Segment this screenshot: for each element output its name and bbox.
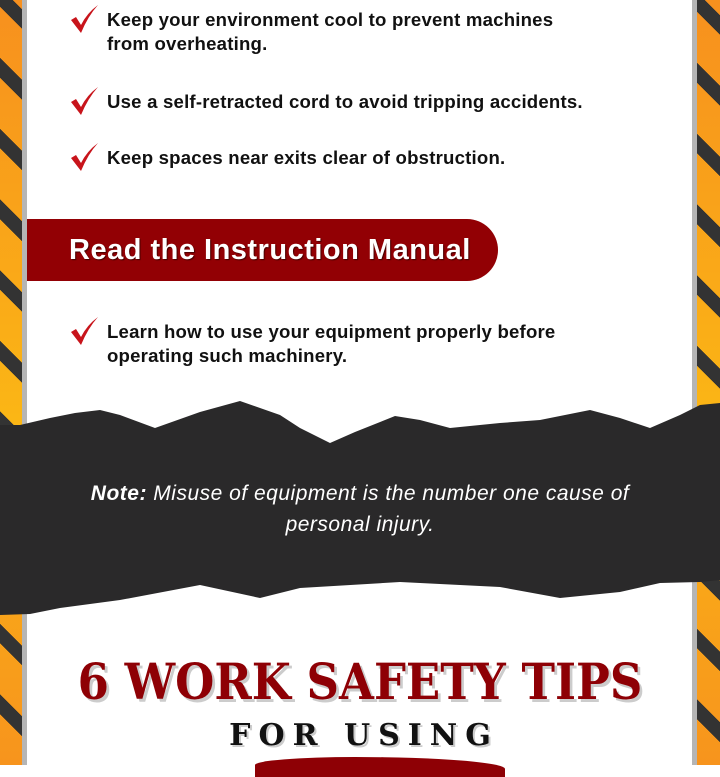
note text: personal injury. bbox=[286, 513, 434, 536]
section heading: Read the Instruction Manual: Read the Instruction Manual bbox=[69, 234, 471, 266]
section heading: Read the Instruction Manual bbox=[27, 219, 498, 281]
tip: keep cool bbox=[71, 5, 553, 54]
subtitle: FOR USING bbox=[229, 718, 499, 753]
tip: learn equipment: Learn how to use your equipment properly before bbox=[107, 321, 555, 342]
tip: learn equipment: operating such machinery. bbox=[107, 345, 347, 366]
tip: learn equipment bbox=[71, 317, 555, 366]
tip: self-retracted cord bbox=[71, 87, 583, 115]
title: 6 WORK SAFETY TIPS bbox=[78, 652, 642, 711]
tip: keep cool: from overheating. bbox=[107, 33, 267, 54]
left hazard stripe bbox=[0, 0, 30, 765]
right hazard stripe bbox=[692, 0, 720, 765]
tip: exits clear bbox=[71, 143, 505, 171]
red brush stroke bbox=[255, 757, 505, 777]
note text bbox=[91, 482, 630, 536]
tip: exits clear: Keep spaces near exits clear of obstruction. bbox=[107, 147, 505, 168]
tip: keep cool: Keep your environment cool to prevent machines bbox=[107, 9, 553, 30]
tip: self-retracted cord: Use a self-retracted cord to avoid tripping accidents. bbox=[107, 91, 583, 112]
note text: Note: Misuse of equipment is the number one cause of bbox=[91, 482, 629, 505]
